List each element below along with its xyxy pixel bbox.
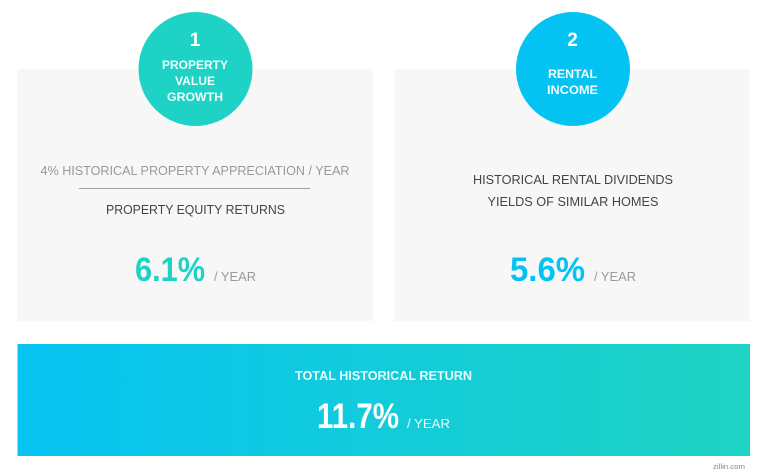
rental dividends text xyxy=(473,172,673,209)
value: 6.1% per year: / YEAR xyxy=(214,269,256,284)
panel: property value growth xyxy=(18,12,372,321)
panel background xyxy=(394,69,750,321)
value: 6.1% per year: 6.1% xyxy=(135,251,205,289)
badge circle: 1 property value growth: GROWTH xyxy=(167,90,223,104)
equity returns text: PROPERTY EQUITY RETURNS xyxy=(106,202,285,217)
value: 5.6% per year xyxy=(510,251,636,289)
gradient background xyxy=(18,344,750,456)
badge circle: 1 property value growth: 1 xyxy=(190,30,201,51)
appreciation text: 4% HISTORICAL PROPERTY APPRECIATION / YEAR xyxy=(40,163,350,178)
badge circle: 2 rental income xyxy=(516,12,630,126)
rental dividends text: YIELDS OF SIMILAR HOMES xyxy=(488,194,659,209)
banner: total historical return xyxy=(18,344,750,456)
panel: rental income xyxy=(394,12,750,321)
panel background xyxy=(18,69,372,321)
badge circle: 2 rental income: INCOME xyxy=(547,83,598,97)
value: 11.7% per year: 11.7% xyxy=(317,397,399,436)
badge circle: 1 property value growth: VALUE xyxy=(175,74,215,88)
rental dividends text: HISTORICAL RENTAL DIVIDENDS xyxy=(473,172,673,187)
value: 5.6% per year: 5.6% xyxy=(510,251,585,289)
badge circle: 2 rental income: 2 xyxy=(567,30,578,51)
value: 11.7% per year: / YEAR xyxy=(407,416,450,431)
banner heading: TOTAL HISTORICAL RETURN xyxy=(295,368,472,383)
fraction divider xyxy=(79,188,310,189)
value: 6.1% per year xyxy=(135,251,256,289)
watermark: zillin.com xyxy=(713,464,745,471)
badge circle: 2 rental income: RENTAL xyxy=(548,67,597,81)
badge circle: 1 property value growth: PROPERTY xyxy=(162,58,228,72)
badge circle: 1 property value growth xyxy=(138,12,252,126)
value: 5.6% per year: / YEAR xyxy=(594,269,636,284)
